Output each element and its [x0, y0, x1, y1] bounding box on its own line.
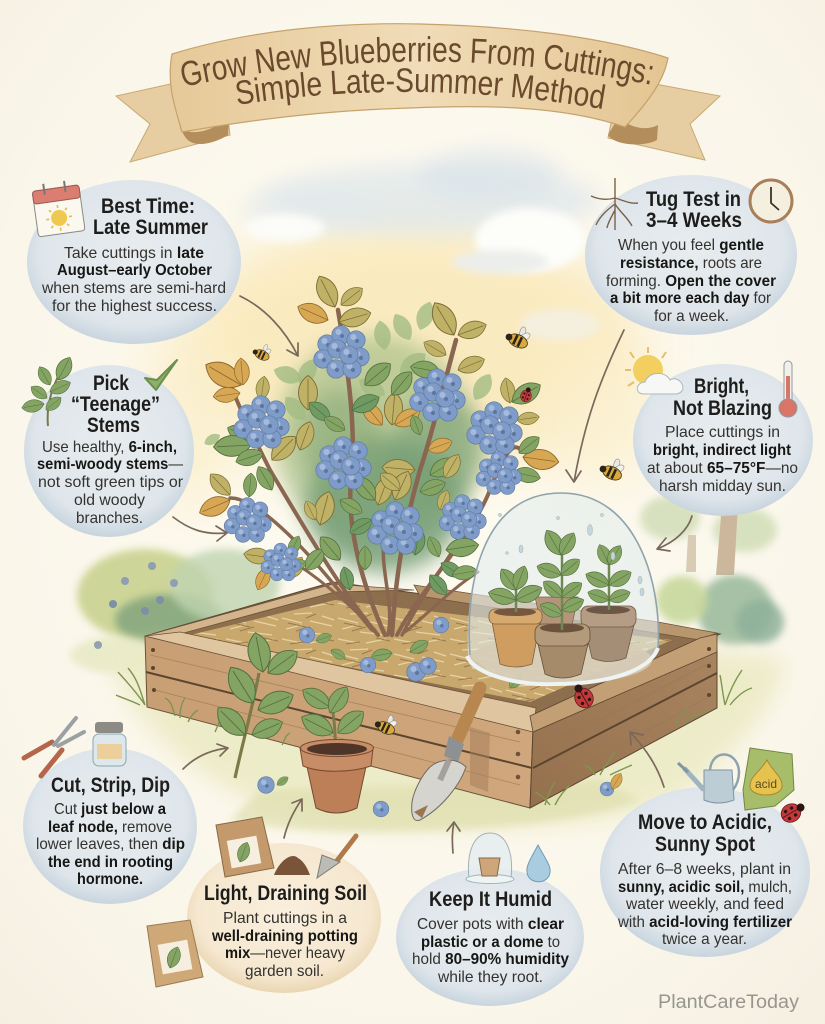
- arrow: stems to bush: [173, 517, 227, 541]
- icon: acid fertilizer bag: acid: [755, 777, 777, 791]
- bush branches: [230, 310, 522, 635]
- bed inner back walls: [152, 582, 720, 714]
- body text: [37, 439, 184, 527]
- terracotta pot with seedling: [297, 682, 374, 813]
- body text: water weekly, and feed: [625, 896, 784, 913]
- body text: not soft green tips or: [38, 474, 184, 491]
- icon: thermometer: [779, 361, 797, 417]
- body text: old woody: [74, 492, 145, 509]
- background shrubs and tree: [70, 496, 784, 673]
- banner left fold: [180, 118, 229, 144]
- body text: [36, 801, 185, 888]
- body text: when stems are semi-hard: [41, 280, 226, 297]
- banner left tail: [116, 83, 230, 162]
- dome floor: [468, 636, 652, 684]
- arrow: soil to pot: [284, 799, 302, 838]
- body text: for the highest success.: [52, 298, 217, 315]
- leafy cutting: [211, 631, 303, 778]
- heading: Keep It Humid: [429, 888, 552, 911]
- icon: acid fertilizer bag: [743, 748, 794, 810]
- body text: well-draining potting: [211, 928, 358, 945]
- title text: Grow New Blueberries From Cuttings:: [182, 36, 653, 87]
- bed top rims: [145, 632, 536, 732]
- brand watermark: PlantCareToday: [658, 992, 800, 1013]
- ladybug on bed: [569, 681, 597, 711]
- icon: leafy sprig: [21, 354, 76, 426]
- body text: August–early October: [57, 262, 212, 279]
- loose berries and sprigs on mulch: [299, 617, 525, 691]
- heading: Best Time:: [101, 195, 195, 218]
- sky wash with clouds: [140, 149, 660, 510]
- ground wash: [110, 643, 785, 832]
- body text: [647, 424, 798, 495]
- arrow: best time to bush: [240, 296, 298, 356]
- heading: Stems: [87, 414, 140, 437]
- plank seams and grain: [146, 672, 717, 768]
- icon: check mark: [145, 360, 177, 390]
- body text: mix—never heavy: [225, 945, 345, 962]
- body text: for a week.: [654, 308, 729, 325]
- back pot: [535, 597, 578, 625]
- body text: Plant cuttings in a: [223, 910, 347, 927]
- body text: [412, 916, 569, 986]
- body text: Place cuttings in: [665, 424, 780, 441]
- icon: watering can: [678, 754, 739, 803]
- bee: [375, 715, 398, 737]
- arrow: acidic to bed: [630, 732, 664, 787]
- dome outline and rim: [469, 493, 658, 655]
- arrow: cut to cutting: [183, 744, 228, 769]
- body text: When you feel gentle: [618, 237, 764, 254]
- title text: Simple Late-Summer Method: [236, 68, 606, 109]
- body text: the end in rooting: [48, 854, 173, 871]
- arrow: humid to trowel: [447, 822, 460, 853]
- banner right fold: [608, 118, 658, 144]
- body text: forming. Open the cover: [606, 273, 776, 290]
- bed left face: [145, 636, 533, 808]
- heading: Pick: [93, 372, 129, 395]
- heading: Not Blazing: [673, 397, 772, 420]
- body text: branches.: [76, 510, 143, 527]
- callout: teenage stems: [21, 354, 194, 537]
- callout: keep it humid: [396, 833, 584, 1006]
- arrow: tug test to dome: [566, 330, 624, 482]
- body text: [41, 245, 226, 315]
- icon: ladybug: [778, 798, 808, 826]
- body text: with acid-loving fertilizer: [617, 914, 792, 931]
- body text: Use healthy, 6-inch,: [42, 439, 177, 456]
- pot front: [535, 624, 590, 678]
- heading: 3–4 Weeks: [646, 209, 742, 232]
- arrows: [173, 296, 692, 853]
- icon: small trowel: [317, 836, 356, 878]
- arrow: bright to dome: [657, 516, 692, 551]
- blueberry clusters: [224, 326, 522, 581]
- body text: hold 80–90% humidity: [412, 951, 569, 968]
- body text: Cut just below a: [54, 801, 166, 818]
- body text: garden soil.: [245, 963, 324, 980]
- pot left: [489, 608, 542, 667]
- title banner: [115, 23, 721, 163]
- body text: hormone.: [77, 871, 143, 888]
- body text: lower leaves, then dip: [36, 836, 185, 853]
- icon: seed bag: [216, 817, 274, 877]
- heading: “Teenage”: [71, 393, 160, 416]
- heading: Sunny Spot: [655, 833, 755, 856]
- bee: [506, 326, 531, 351]
- mulch: [186, 600, 672, 702]
- body text: while they root.: [437, 969, 543, 986]
- body text: plastic or a dome to: [421, 934, 560, 951]
- pale distant leaves: [202, 299, 497, 448]
- heading: [93, 195, 208, 239]
- body text: After 6–8 weeks, plant in: [618, 861, 791, 878]
- dome back: [468, 493, 658, 683]
- heading: [71, 372, 160, 437]
- pot right: [581, 606, 636, 662]
- callout: best time: [27, 179, 241, 344]
- body text: [617, 861, 792, 948]
- body text: twice a year.: [662, 931, 747, 948]
- heading: Cut, Strip, Dip: [51, 774, 170, 797]
- icon: roots: [591, 178, 638, 230]
- seedlings in dome: [486, 526, 635, 630]
- icon: water drop: [527, 845, 550, 882]
- glass dome with potted cuttings: [467, 493, 658, 684]
- icon: pruners: [24, 718, 84, 776]
- heading: [673, 375, 772, 420]
- bee: [600, 458, 625, 483]
- bed back rims: [145, 584, 414, 636]
- icon: potting mix bag: [147, 920, 203, 987]
- heading: Move to Acidic,: [638, 811, 772, 834]
- icon: rooting hormone jar: [93, 722, 126, 766]
- water droplets: [498, 513, 644, 596]
- insects: [253, 326, 625, 737]
- heading: Tug Test in: [646, 188, 741, 211]
- grass tufts: [116, 668, 752, 805]
- body text: Take cuttings in late: [64, 245, 204, 262]
- garden trowel: [412, 688, 480, 821]
- body text: sunny, acidic soil, mulch,: [618, 879, 792, 896]
- body text: semi-woody stems—: [37, 456, 183, 473]
- body text: resistance, roots are: [620, 255, 762, 272]
- body text: Cover pots with clear: [417, 916, 564, 933]
- body text: [606, 237, 776, 325]
- heading: Bright,: [694, 375, 749, 398]
- bee: [253, 344, 272, 362]
- callout: move to acidic sunny spot: [600, 748, 810, 957]
- body text: bright, indirect light: [653, 442, 792, 459]
- icon: soil pile: [274, 856, 310, 875]
- callout: tug test: [585, 175, 797, 335]
- dome base rim: [467, 648, 658, 684]
- body text: [211, 910, 358, 980]
- icon: sun and cloud: [625, 347, 683, 394]
- body text: at about 65–75°F—no: [647, 460, 798, 477]
- heading: [638, 811, 772, 856]
- heading: Light, Draining Soil: [204, 882, 367, 905]
- banner body: [170, 24, 668, 132]
- body text: harsh midday sun.: [659, 478, 786, 495]
- raised wooden garden bed: [145, 582, 720, 808]
- body text: leaf node, remove: [48, 819, 172, 836]
- icon: clock: [750, 180, 792, 222]
- blueberry bush: [196, 272, 560, 635]
- callout: bright not blazing: [625, 347, 813, 516]
- banner right tail: [608, 84, 720, 160]
- body text: a bit more each day for: [610, 290, 772, 307]
- ladybug on leaf: [519, 386, 534, 403]
- bed right face: [530, 650, 717, 808]
- heading: [646, 188, 742, 232]
- icon: small dome with pot: [466, 833, 514, 884]
- callout: light draining soil: [147, 817, 381, 993]
- bush foliage backdrop: [275, 335, 485, 573]
- heading: Late Summer: [93, 216, 208, 239]
- bush leaves: [196, 272, 560, 599]
- icon: calendar with sun: [31, 179, 85, 237]
- callout: cut strip dip: [23, 718, 197, 904]
- loose ground berries: [258, 771, 625, 817]
